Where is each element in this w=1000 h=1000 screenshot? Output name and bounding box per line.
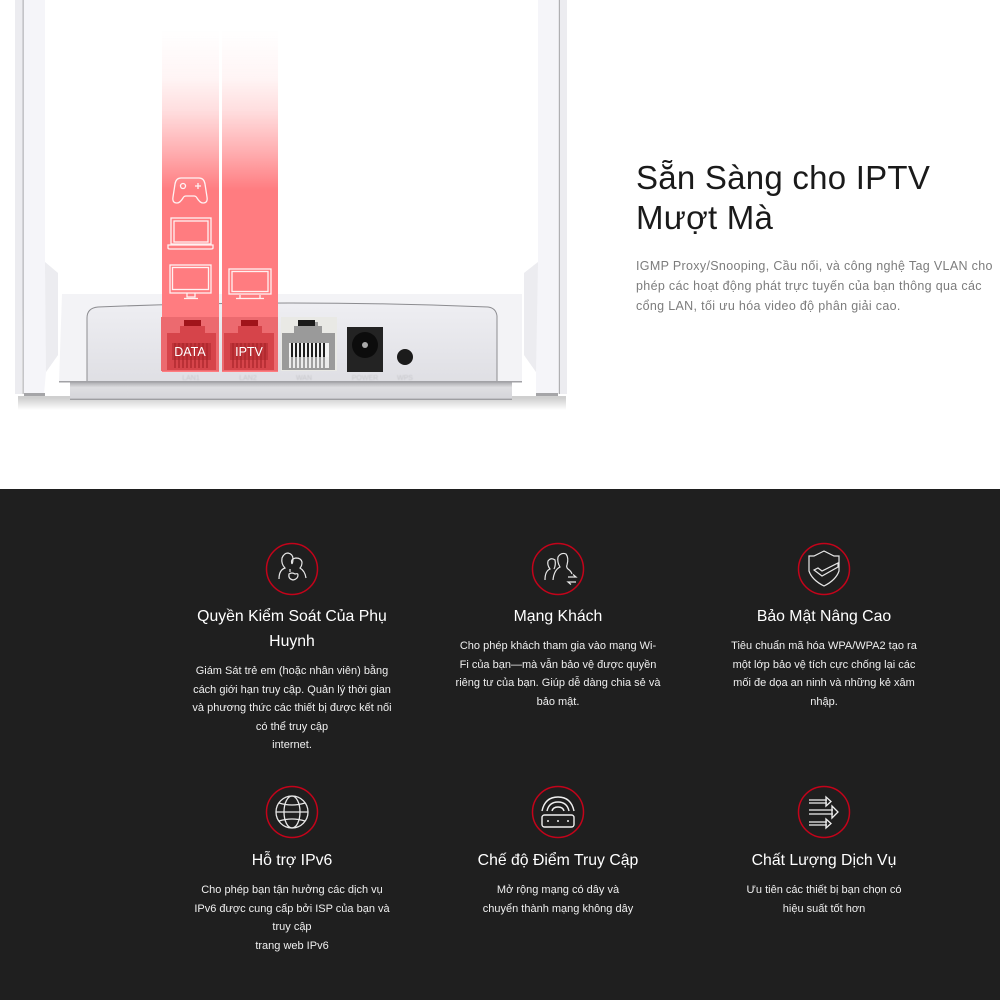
text: internet. [272,739,312,751]
power jack [347,327,383,372]
feature: quality of service [747,786,901,915]
LAN port IPTV [222,317,278,371]
title [636,159,930,236]
text: Cho phép bạn tận hưởng các dịch vụ [201,884,383,896]
heading: Chế độ Điểm Truy Cập [478,852,638,869]
text [483,884,634,915]
text: Mở rộng mạng có dây và [497,884,619,896]
heading: Huynh [269,633,315,650]
heading: Hỗ trợ IPv6 [252,852,332,869]
feature: guest network [456,542,660,708]
port labels [182,375,413,382]
text [194,884,390,952]
icon: laptop [168,218,213,249]
heading: Mạng Khách [514,608,602,625]
text: riêng tư của bạn. Giúp dễ dàng chia sẻ và [456,677,660,689]
icon: parent and child [266,542,318,596]
text [192,664,392,751]
icon: shield [798,542,850,596]
shadow under router [18,396,566,410]
title: Mượt Mà [636,199,773,236]
port labels: WAN [296,375,312,382]
text [456,640,660,708]
text: có thể truy cập [256,721,328,733]
port labels: LAN1 [182,375,200,382]
LAN port DATA [161,317,219,371]
right antenna [524,0,567,396]
red highlight bands [162,30,278,372]
text: Tiêu chuẩn mã hóa WPA/WPA2 tạo ra [731,640,917,652]
text: Fi của bạn—mà vẫn bảo vệ được quyền [460,659,656,671]
icon: access point [532,786,584,838]
title: Sẵn Sàng cho IPTV [636,159,930,196]
feature: parental controls [192,542,392,751]
WAN port [281,317,337,371]
text: và phương thức các thiết bị được kết nối [192,702,392,714]
port labels: LAN2 [239,375,257,382]
dark features panel [0,489,1000,1000]
text: trang web IPv6 [255,940,329,952]
label DATA: DATA [174,345,206,359]
heading: Quyền Kiểm Soát Của Phụ [197,608,387,625]
text [731,640,917,708]
feature: IPv6 [194,786,390,952]
text: Cho phép khách tham gia vào mạng Wi- [460,640,656,652]
heading: Bảo Mật Nâng Cao [757,608,891,625]
text: mối đe dọa an ninh và những kẻ xâm [733,677,915,689]
left antenna [15,0,58,396]
label IPTV: IPTV [235,345,264,359]
description: cổng LAN, tối ưu hóa video độ phân giải cao. [636,299,901,313]
feature: advanced security [731,542,917,708]
text: nhập. [810,696,838,708]
text: cách giới hạn truy cập. Quản lý thời gian [193,684,391,696]
text: chuyển thành mạng không dây [483,903,633,915]
text: hiệu suất tốt hơn [783,903,865,915]
port labels: WPS [397,375,413,382]
text: IPv6 được cung cấp bởi ISP của bạn và [194,903,390,915]
text: Ưu tiên các thiết bị bạn chọn có [747,884,901,896]
router illustration [15,0,567,408]
icon: game controller [173,178,207,203]
icon: TV [229,269,271,298]
heading [197,608,387,650]
router body [59,294,522,400]
text: bảo mật. [537,696,579,708]
icon: globe [266,786,318,838]
icon: desktop monitor [170,265,211,298]
heading: Chất Lượng Dịch Vụ [752,852,896,869]
text [747,884,901,915]
WPS button [397,349,413,365]
port labels: POWER [352,375,378,382]
text: truy cập [272,921,312,933]
icon: QoS arrows [798,786,850,838]
description [636,259,993,313]
text: Giám Sát trẻ em (hoặc nhân viên) bằng [196,665,388,677]
description: phép các hoạt động phát trực tuyến của bạn thông qua các [636,279,982,293]
description: IGMP Proxy/Snooping, Cầu nối, và công nghệ Tag VLAN cho [636,259,993,273]
feature: access point mode [478,786,638,915]
text: một lớp bảo vệ tích cực chống lại các [733,659,915,671]
icon: guests [532,542,584,596]
